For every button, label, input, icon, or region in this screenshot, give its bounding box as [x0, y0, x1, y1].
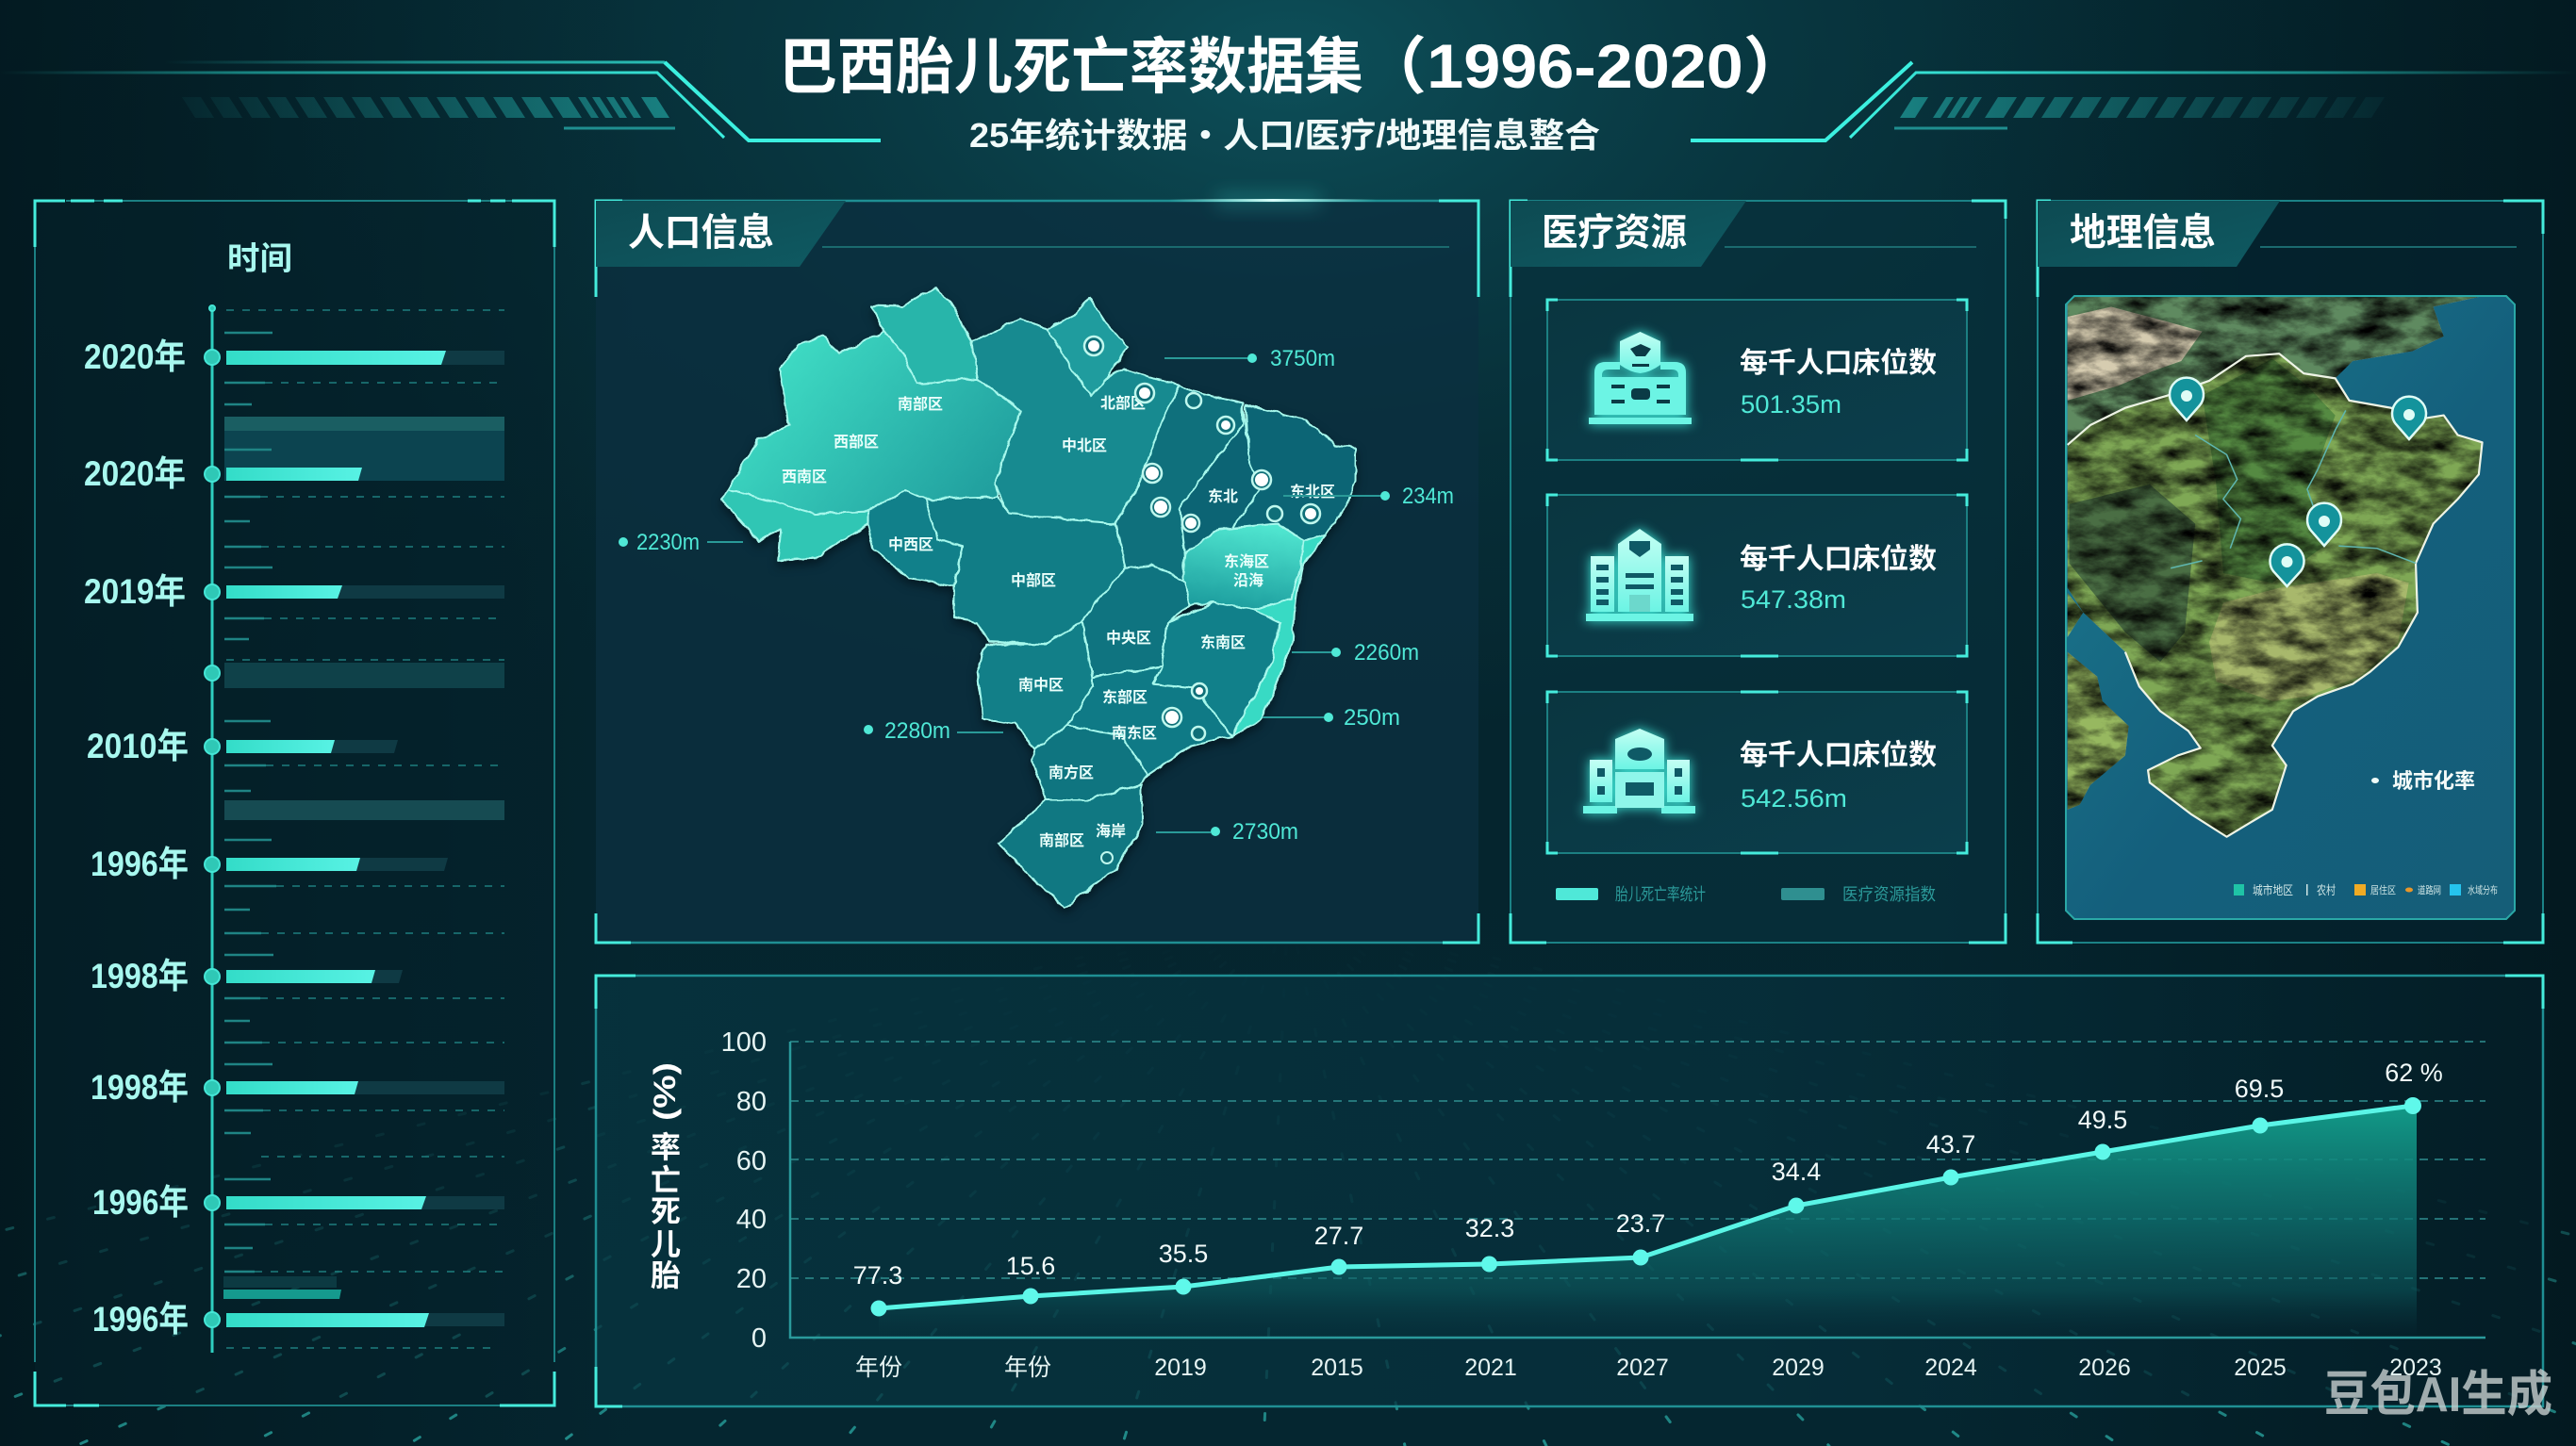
- map callouts: 2730m: [1232, 819, 1298, 845]
- card 1: [1547, 300, 1967, 460]
- map region labels: 海岸: [1096, 823, 1126, 840]
- timeline axis: [211, 308, 213, 1353]
- x axis labels: 2029: [1772, 1355, 1825, 1381]
- medical legend: 胎儿死亡率统计: [1615, 885, 1706, 904]
- map region labels: 东南区: [1200, 633, 1246, 651]
- y axis title: 率: [651, 1130, 681, 1164]
- y axis labels: 0: [751, 1323, 767, 1354]
- map region labels: 沿海: [1233, 572, 1263, 589]
- satellite legend: 城市地区: [2253, 883, 2293, 897]
- value labels: 49.5: [2078, 1106, 2127, 1134]
- map callouts: [619, 346, 1454, 845]
- x axis labels: 2015: [1311, 1355, 1363, 1381]
- icon: hospital 3: [1583, 729, 1695, 813]
- tab heading: geography: [2038, 201, 2280, 267]
- x axis labels: 2019: [1154, 1355, 1207, 1381]
- map region labels: 北部区: [1100, 394, 1146, 412]
- map callouts: 3750m: [1270, 346, 1335, 371]
- tab heading: medical: 医疗资源: [1542, 212, 1687, 254]
- heading: time: 时间: [227, 241, 292, 277]
- map callouts: 2280m: [884, 718, 950, 744]
- icon: hospital 1: [1589, 332, 1692, 424]
- panel: population: [596, 196, 1478, 943]
- map region labels: 东北区: [1290, 483, 1335, 501]
- y axis labels: 60: [736, 1146, 767, 1176]
- x axis labels: 2027: [1616, 1355, 1669, 1381]
- map region labels: [782, 394, 1335, 849]
- area under line: [879, 1106, 2417, 1338]
- x axis labels: 2021: [1464, 1355, 1517, 1381]
- x axis labels: 2025: [2234, 1355, 2287, 1381]
- value labels: 27.7: [1314, 1222, 1363, 1250]
- year labels: 2010年: [87, 727, 189, 765]
- satellite map: [2066, 296, 2515, 919]
- y axis labels: 20: [736, 1264, 767, 1294]
- year labels: 2020年: [84, 337, 186, 376]
- year labels: 2019年: [84, 572, 186, 611]
- map region labels: 中部区: [1011, 571, 1056, 589]
- value labels: 15.6: [1006, 1252, 1055, 1280]
- tab heading: geography: 地理信息: [2070, 212, 2216, 254]
- x axis labels: 年份: [1004, 1355, 1051, 1381]
- card 2 text: 每千人口床位数: [1740, 543, 1937, 575]
- y axis labels: 80: [736, 1087, 767, 1117]
- panel: geography: [2038, 201, 2543, 943]
- urbanization label: 城市化率: [2392, 769, 2475, 793]
- y axis labels: 100: [721, 1027, 767, 1058]
- year labels: [84, 337, 189, 1339]
- year labels: 1998年: [91, 957, 189, 995]
- map callouts: 2230m: [636, 530, 700, 555]
- title: （1996-2020）: [1361, 31, 1809, 101]
- timeline nodes: [205, 305, 220, 1327]
- card 2 text: 547.38m: [1741, 585, 1846, 614]
- map callouts: 234m: [1402, 484, 1454, 509]
- y axis title: 胎: [651, 1258, 681, 1292]
- value labels: 23.7: [1616, 1209, 1665, 1238]
- header decoration: right circuit lines: [1691, 62, 2576, 140]
- card 1 text: 每千人口床位数: [1740, 347, 1937, 379]
- map region labels: 中西区: [888, 536, 933, 553]
- header decoration: left circuit lines: [0, 62, 881, 140]
- map region labels: 东部区: [1102, 688, 1148, 706]
- x axis labels: [855, 1355, 2442, 1381]
- title: [779, 31, 1809, 101]
- card 2: [1547, 495, 1967, 656]
- map pins: [1084, 337, 1320, 863]
- y axis title: [648, 1062, 682, 1292]
- y axis title: 死: [651, 1194, 681, 1228]
- map region labels: 西部区: [834, 433, 879, 451]
- y axis title: 儿: [651, 1227, 681, 1261]
- card 3 text: [1740, 739, 1937, 813]
- panel: medical resources: [1511, 201, 2006, 943]
- satellite legend: 居住区: [2370, 883, 2396, 896]
- value labels: 35.5: [1159, 1240, 1208, 1268]
- value labels: 34.4: [1772, 1158, 1821, 1186]
- map region labels: 南部区: [898, 395, 943, 413]
- map region labels: 南东区: [1112, 724, 1157, 742]
- card 3: [1547, 692, 1967, 853]
- value labels: 62 %: [2385, 1059, 2443, 1087]
- satellite legend: [2234, 883, 2498, 897]
- map of Brazil: [720, 288, 1356, 909]
- map region labels: 南中区: [1018, 677, 1064, 694]
- year labels: 2020年: [84, 454, 186, 493]
- map region labels: 南方区: [1049, 764, 1094, 781]
- subtitle: 25年统计数据・人口/医疗/地理信息整合: [969, 116, 1600, 155]
- map markers: [2170, 378, 2426, 586]
- value labels: 43.7: [1926, 1130, 1975, 1158]
- medical legend: 医疗资源指数: [1842, 885, 1936, 904]
- card 2 text: [1740, 543, 1937, 614]
- map region labels: 南部区: [1039, 831, 1084, 849]
- bands: [223, 417, 504, 1299]
- x axis labels: 年份: [855, 1355, 902, 1381]
- map region labels: 中央区: [1106, 630, 1151, 647]
- chart grid and axes: [790, 1042, 2485, 1338]
- card 1 text: 501.35m: [1741, 390, 1841, 419]
- map callouts: 250m: [1344, 705, 1400, 731]
- title: 巴西胎儿死亡率数据集: [779, 32, 1363, 101]
- tab heading: medical: [1511, 201, 1746, 267]
- bar fills: [226, 351, 446, 1327]
- card 3 text: 每千人口床位数: [1740, 739, 1937, 771]
- panel: line chart: [596, 976, 2543, 1406]
- value labels: [853, 1059, 2443, 1290]
- map callouts: 2260m: [1354, 640, 1419, 665]
- bar tracks: [226, 351, 504, 1326]
- satellite legend: 道路网: [2418, 883, 2441, 896]
- satellite legend: 农村: [2317, 883, 2336, 897]
- y axis title: (%): [648, 1062, 682, 1121]
- card 1 text: [1740, 347, 1937, 419]
- y axis labels: 40: [736, 1205, 767, 1235]
- year labels: 1996年: [91, 845, 189, 883]
- x axis labels: 2024: [1924, 1355, 1977, 1381]
- y axis labels: [721, 1027, 767, 1354]
- satellite legend: 水域分布: [2468, 884, 2498, 896]
- value labels: 69.5: [2235, 1075, 2284, 1103]
- value labels: 32.3: [1465, 1214, 1514, 1242]
- year labels: 1996年: [92, 1300, 189, 1339]
- tab heading: population: 人口信息: [628, 212, 774, 254]
- trend line: [871, 1097, 2421, 1316]
- value labels: 77.3: [853, 1261, 902, 1290]
- map region labels: 东海区: [1224, 552, 1269, 570]
- tab heading: population: [596, 201, 846, 267]
- map region labels: 东北: [1208, 487, 1238, 505]
- panel: timeline: [35, 201, 554, 1405]
- x axis labels: 2023: [2389, 1355, 2442, 1381]
- year labels: 1998年: [91, 1068, 189, 1107]
- y axis title: 亡: [651, 1163, 681, 1197]
- icon: hospital 2: [1586, 529, 1693, 621]
- card 3 text: 542.56m: [1741, 784, 1847, 813]
- map region labels: 中北区: [1062, 437, 1107, 454]
- year labels: 1996年: [92, 1183, 189, 1222]
- map region labels: 西南区: [782, 468, 827, 485]
- medical legend: [1556, 885, 1936, 904]
- x axis labels: 2026: [2078, 1355, 2131, 1381]
- watermark: 豆包AI生成: [2324, 1368, 2552, 1422]
